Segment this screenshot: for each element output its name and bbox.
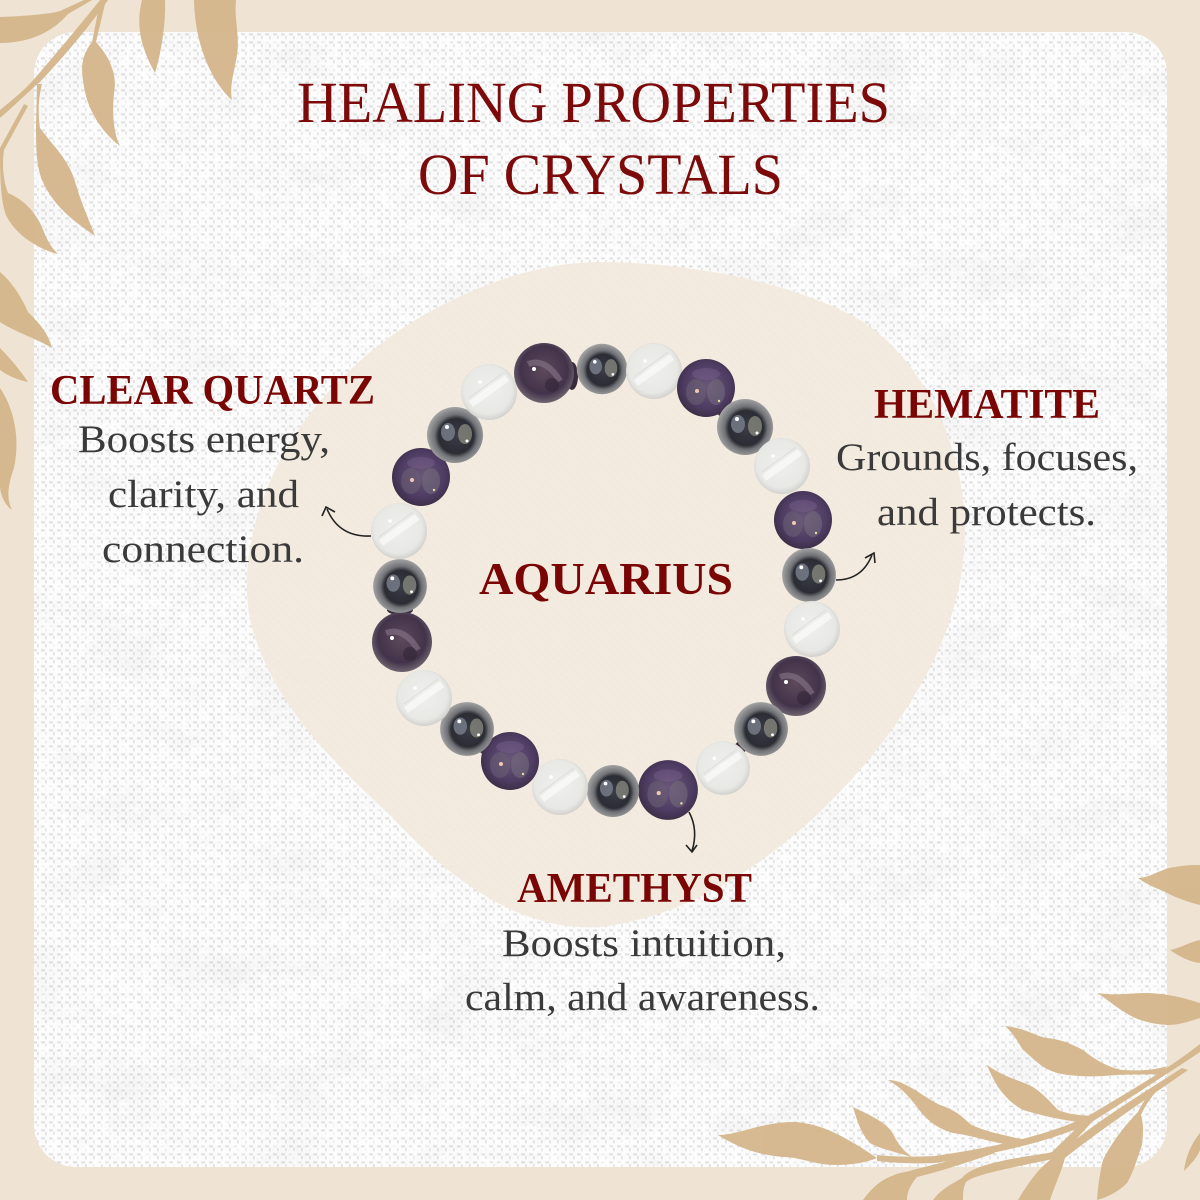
- bead: quartz: [396, 670, 452, 726]
- bead: quartz: [754, 438, 810, 494]
- callout: Clear Quartz: CLEAR QUARTZ: [50, 368, 375, 414]
- bead: quartz: [461, 364, 517, 420]
- bead: amethyst: [481, 732, 539, 790]
- callout: Hematite: Grounds, focuses,: [836, 436, 1138, 479]
- bead: amethyst: [677, 359, 735, 417]
- bead: amethyst: [372, 612, 432, 672]
- callout: Hematite: [836, 382, 1138, 534]
- central cream blob: [247, 262, 965, 927]
- decoration: top-left leaves: [0, 0, 238, 510]
- bead: hematite: [427, 407, 483, 463]
- callout: Amethyst: Boosts intuition,: [502, 922, 786, 965]
- callout: Amethyst: AMETHYST: [517, 866, 752, 912]
- title: HEALING PROPERTIES: [297, 70, 890, 135]
- callout: Clear Quartz: clarity, and: [108, 473, 300, 516]
- bead: hematite: [734, 702, 788, 756]
- bead: hematite: [587, 765, 639, 817]
- callout: Clear Quartz: Boosts energy,: [78, 418, 330, 461]
- crystal bracelet: [371, 343, 840, 820]
- decoration: bottom-right leaves: [718, 865, 1200, 1200]
- bead: amethyst: [774, 491, 832, 549]
- title: OF CRYSTALS: [418, 142, 783, 207]
- bead: hematite: [717, 399, 773, 455]
- arrow: to Clear Quartz: [322, 507, 371, 536]
- bead: hematite: [373, 559, 427, 613]
- bead: amethyst: [638, 760, 698, 820]
- bead: amethyst: [766, 656, 826, 716]
- bead: hematite: [440, 702, 494, 756]
- bead: amethyst: [514, 343, 574, 403]
- callout: Clear Quartz: connection.: [102, 528, 304, 571]
- bead: quartz: [784, 601, 840, 657]
- bead: amethyst: [392, 448, 450, 506]
- center label: Aquarius: AQUARIUS: [479, 553, 733, 604]
- bead: quartz: [626, 343, 682, 399]
- callout: Amethyst: [465, 866, 820, 1019]
- arrow: to Amethyst: [686, 812, 697, 852]
- spacer beads: [387, 362, 753, 762]
- bead: hematite: [782, 548, 836, 602]
- bead: quartz: [371, 503, 427, 559]
- title: [297, 70, 890, 207]
- callout: Amethyst: calm, and awareness.: [465, 976, 820, 1019]
- arrow: to Hematite: [836, 553, 875, 580]
- bead: quartz: [532, 759, 588, 815]
- bead: quartz: [696, 741, 750, 795]
- callout: Hematite: HEMATITE: [874, 382, 1100, 428]
- callout: Clear Quartz: [50, 368, 375, 571]
- bead: hematite: [577, 344, 627, 394]
- callout: Hematite: and protects.: [877, 491, 1096, 534]
